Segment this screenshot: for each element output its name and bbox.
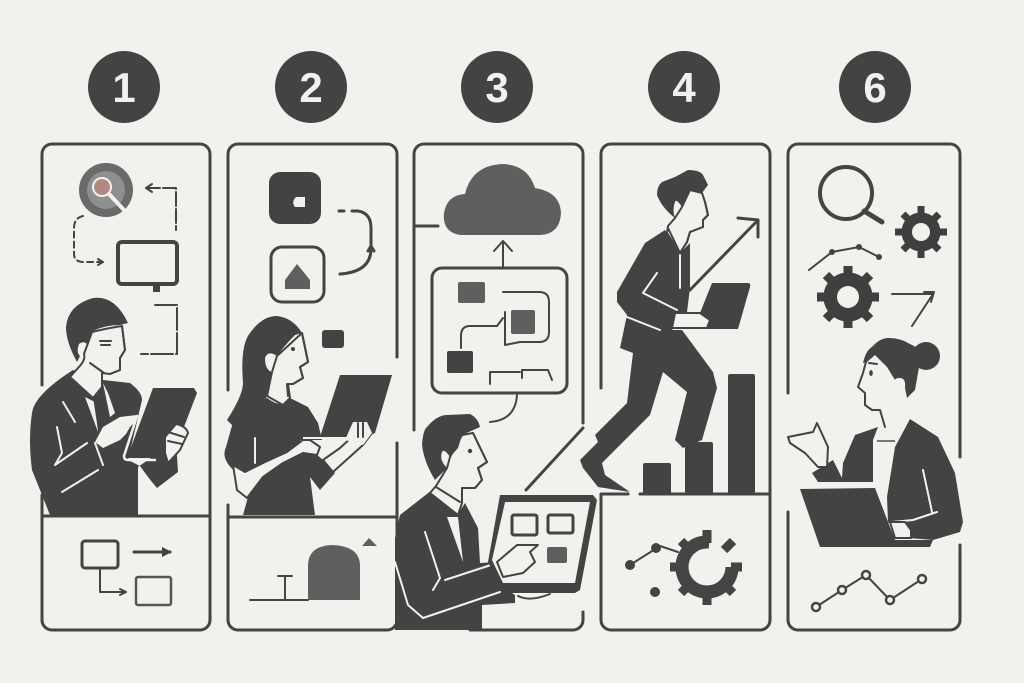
icon: magnifier xyxy=(820,167,882,222)
line trend small xyxy=(809,244,882,270)
number badge 3: 3 xyxy=(485,64,509,111)
left arm xyxy=(233,440,320,498)
number badge 6 xyxy=(839,51,911,123)
arrow up xyxy=(494,241,512,268)
brow xyxy=(869,363,877,364)
icon: dark square xyxy=(269,172,321,224)
footer flow diagram xyxy=(82,541,172,605)
hand on tablet xyxy=(95,415,137,448)
icon: small gear xyxy=(895,206,947,258)
torso xyxy=(30,370,178,515)
torso xyxy=(224,398,335,515)
icon: large gear xyxy=(817,266,879,328)
body xyxy=(580,230,717,492)
suit xyxy=(395,490,515,630)
arrow up right xyxy=(690,218,758,290)
number badge 6: 6 xyxy=(863,64,887,111)
arrow seven shape xyxy=(892,292,934,326)
eye xyxy=(869,370,873,376)
bar chart xyxy=(643,374,755,494)
number badge 2: 2 xyxy=(299,64,323,111)
panel 4 xyxy=(580,144,770,630)
person 3 with laptop xyxy=(395,414,597,630)
eye xyxy=(291,347,295,351)
collar line xyxy=(877,440,895,442)
neck and face xyxy=(430,433,487,515)
panel 1 frame xyxy=(42,144,210,630)
neck and face xyxy=(70,326,125,398)
hand behind tablet xyxy=(165,424,188,463)
panel 6 frame xyxy=(788,144,960,630)
tablet xyxy=(127,388,197,458)
cardigan highlights xyxy=(892,470,937,522)
typing hand xyxy=(890,522,911,538)
person 2 with tablet xyxy=(224,316,392,515)
panel 3 frame xyxy=(414,144,583,630)
pointing hand xyxy=(497,545,538,577)
suit highlights xyxy=(55,402,103,492)
hair xyxy=(66,298,128,362)
panel 3 xyxy=(395,144,597,630)
hair xyxy=(422,414,480,480)
person 6 with laptop xyxy=(788,338,963,547)
circuit diagram box xyxy=(432,268,567,393)
panel 2 frame xyxy=(228,144,397,630)
face detail xyxy=(90,326,125,374)
neck and face xyxy=(267,333,308,405)
flow arrow dashed xyxy=(339,211,374,274)
tie and shirt xyxy=(85,383,115,432)
palm under laptop xyxy=(518,594,550,599)
laptop xyxy=(488,495,597,593)
suit highlights xyxy=(627,255,680,330)
face outline xyxy=(668,202,708,253)
tablet lower edge xyxy=(303,437,342,439)
connector line left xyxy=(415,224,438,228)
left sleeve xyxy=(812,427,878,482)
hair and bun xyxy=(863,338,940,398)
person 4 climbing xyxy=(580,170,750,492)
number badge 4: 4 xyxy=(672,64,696,111)
flow bracket: right xyxy=(141,305,177,354)
face outline xyxy=(858,358,885,427)
hand and cuff xyxy=(672,313,710,328)
shirt sliver xyxy=(447,517,463,562)
panel 1 xyxy=(30,144,210,630)
hair xyxy=(227,316,302,425)
neck and face xyxy=(667,190,708,253)
suit highlights xyxy=(395,532,500,618)
flow arrow: left dashed loop xyxy=(74,216,103,265)
icon: monitor with tab xyxy=(118,242,177,292)
raised hand xyxy=(788,423,828,467)
fingers xyxy=(168,432,184,444)
icon: outlined square with shape xyxy=(271,247,324,302)
diagonal line xyxy=(526,428,583,490)
laptop xyxy=(800,488,933,547)
icon: cloud xyxy=(444,164,561,235)
small square xyxy=(322,330,344,348)
panel 6 xyxy=(788,144,963,630)
right cardigan xyxy=(887,419,963,540)
tablet xyxy=(700,283,750,329)
right arm xyxy=(323,422,372,472)
panel 2 xyxy=(224,144,397,630)
connector curve xyxy=(490,394,517,422)
person 1 with tablet xyxy=(30,298,197,515)
face outline xyxy=(462,433,487,502)
face outline xyxy=(287,333,308,396)
tablet xyxy=(320,375,392,437)
panel 4 frame xyxy=(601,144,770,630)
line chart footer xyxy=(812,571,926,611)
number badge 2 xyxy=(275,51,347,123)
eye xyxy=(468,449,472,453)
number badge 4 xyxy=(648,51,720,123)
number badge 1: 1 xyxy=(112,64,136,111)
sleeve highlight xyxy=(254,438,256,463)
number badge 3 xyxy=(461,51,533,123)
collar line xyxy=(436,487,460,502)
icon: magnifier badge xyxy=(79,163,133,217)
hair xyxy=(657,170,708,218)
footer chart xyxy=(250,538,377,600)
footer gears and nodes xyxy=(625,530,742,605)
flow arrow: top right loop xyxy=(146,184,176,230)
number badge 1 xyxy=(88,51,160,123)
